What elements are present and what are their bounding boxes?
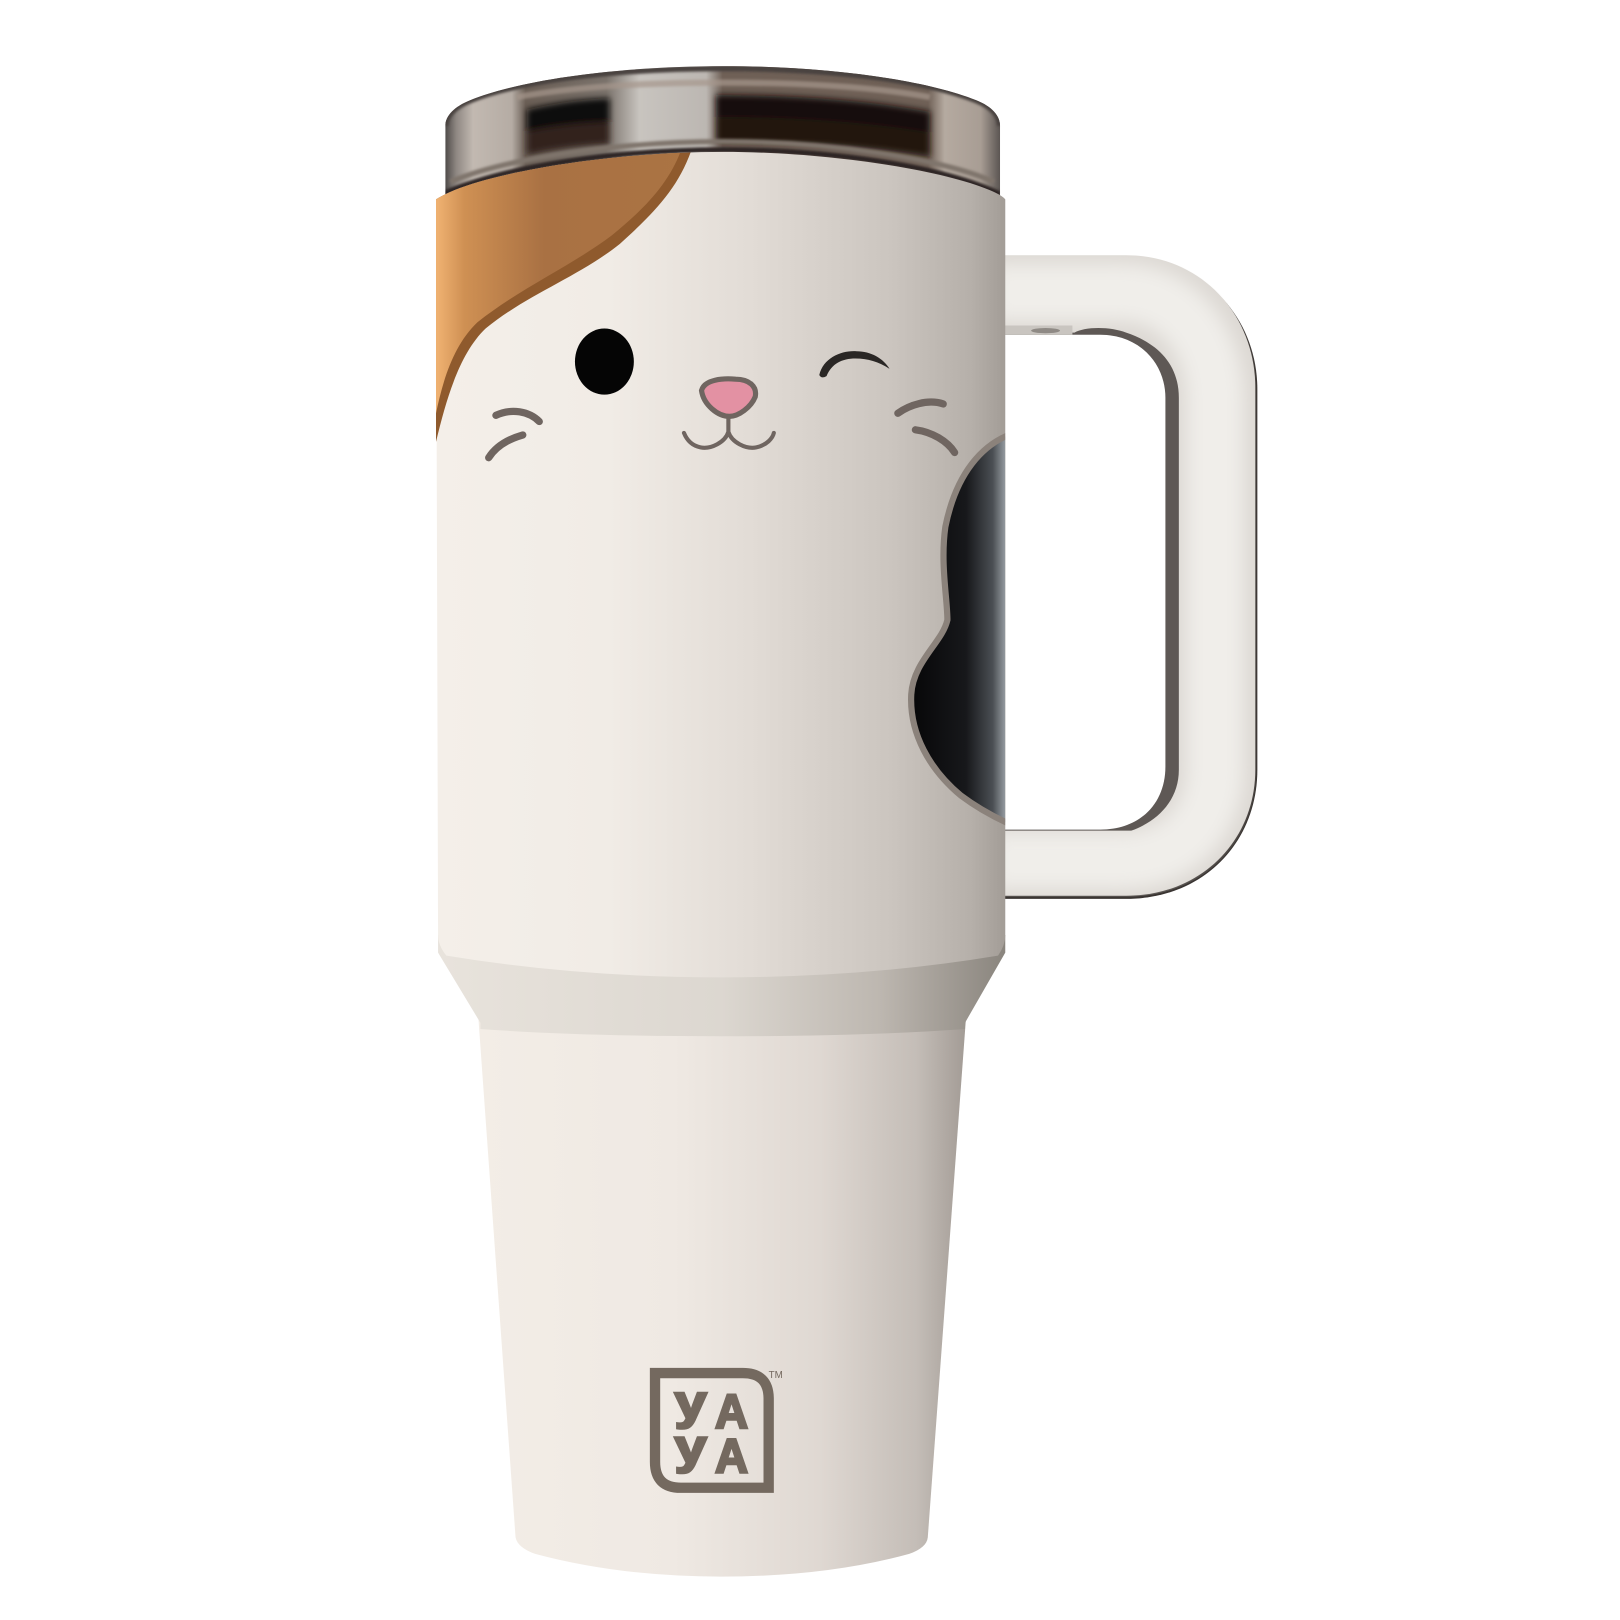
tumbler upper body (436, 152, 1005, 977)
black patch (908, 433, 1006, 826)
logo: y (675, 1376, 707, 1430)
winking eye (819, 351, 890, 377)
logo: TM (769, 1370, 783, 1381)
orange patch (436, 152, 690, 442)
tumbler lower section (478, 1018, 966, 1577)
logo: A (715, 1385, 748, 1439)
right whiskers (898, 402, 955, 453)
left eye (575, 329, 634, 395)
logo: y (675, 1420, 707, 1474)
left whiskers (489, 411, 539, 458)
mouth (684, 417, 774, 448)
lid (445, 66, 1000, 196)
tumbler collar band (438, 935, 1005, 1036)
logo: A (715, 1429, 748, 1483)
logo (655, 1370, 783, 1488)
illustration: cat tumbler (436, 66, 1258, 1576)
nose (702, 379, 756, 416)
handle (992, 255, 1257, 899)
